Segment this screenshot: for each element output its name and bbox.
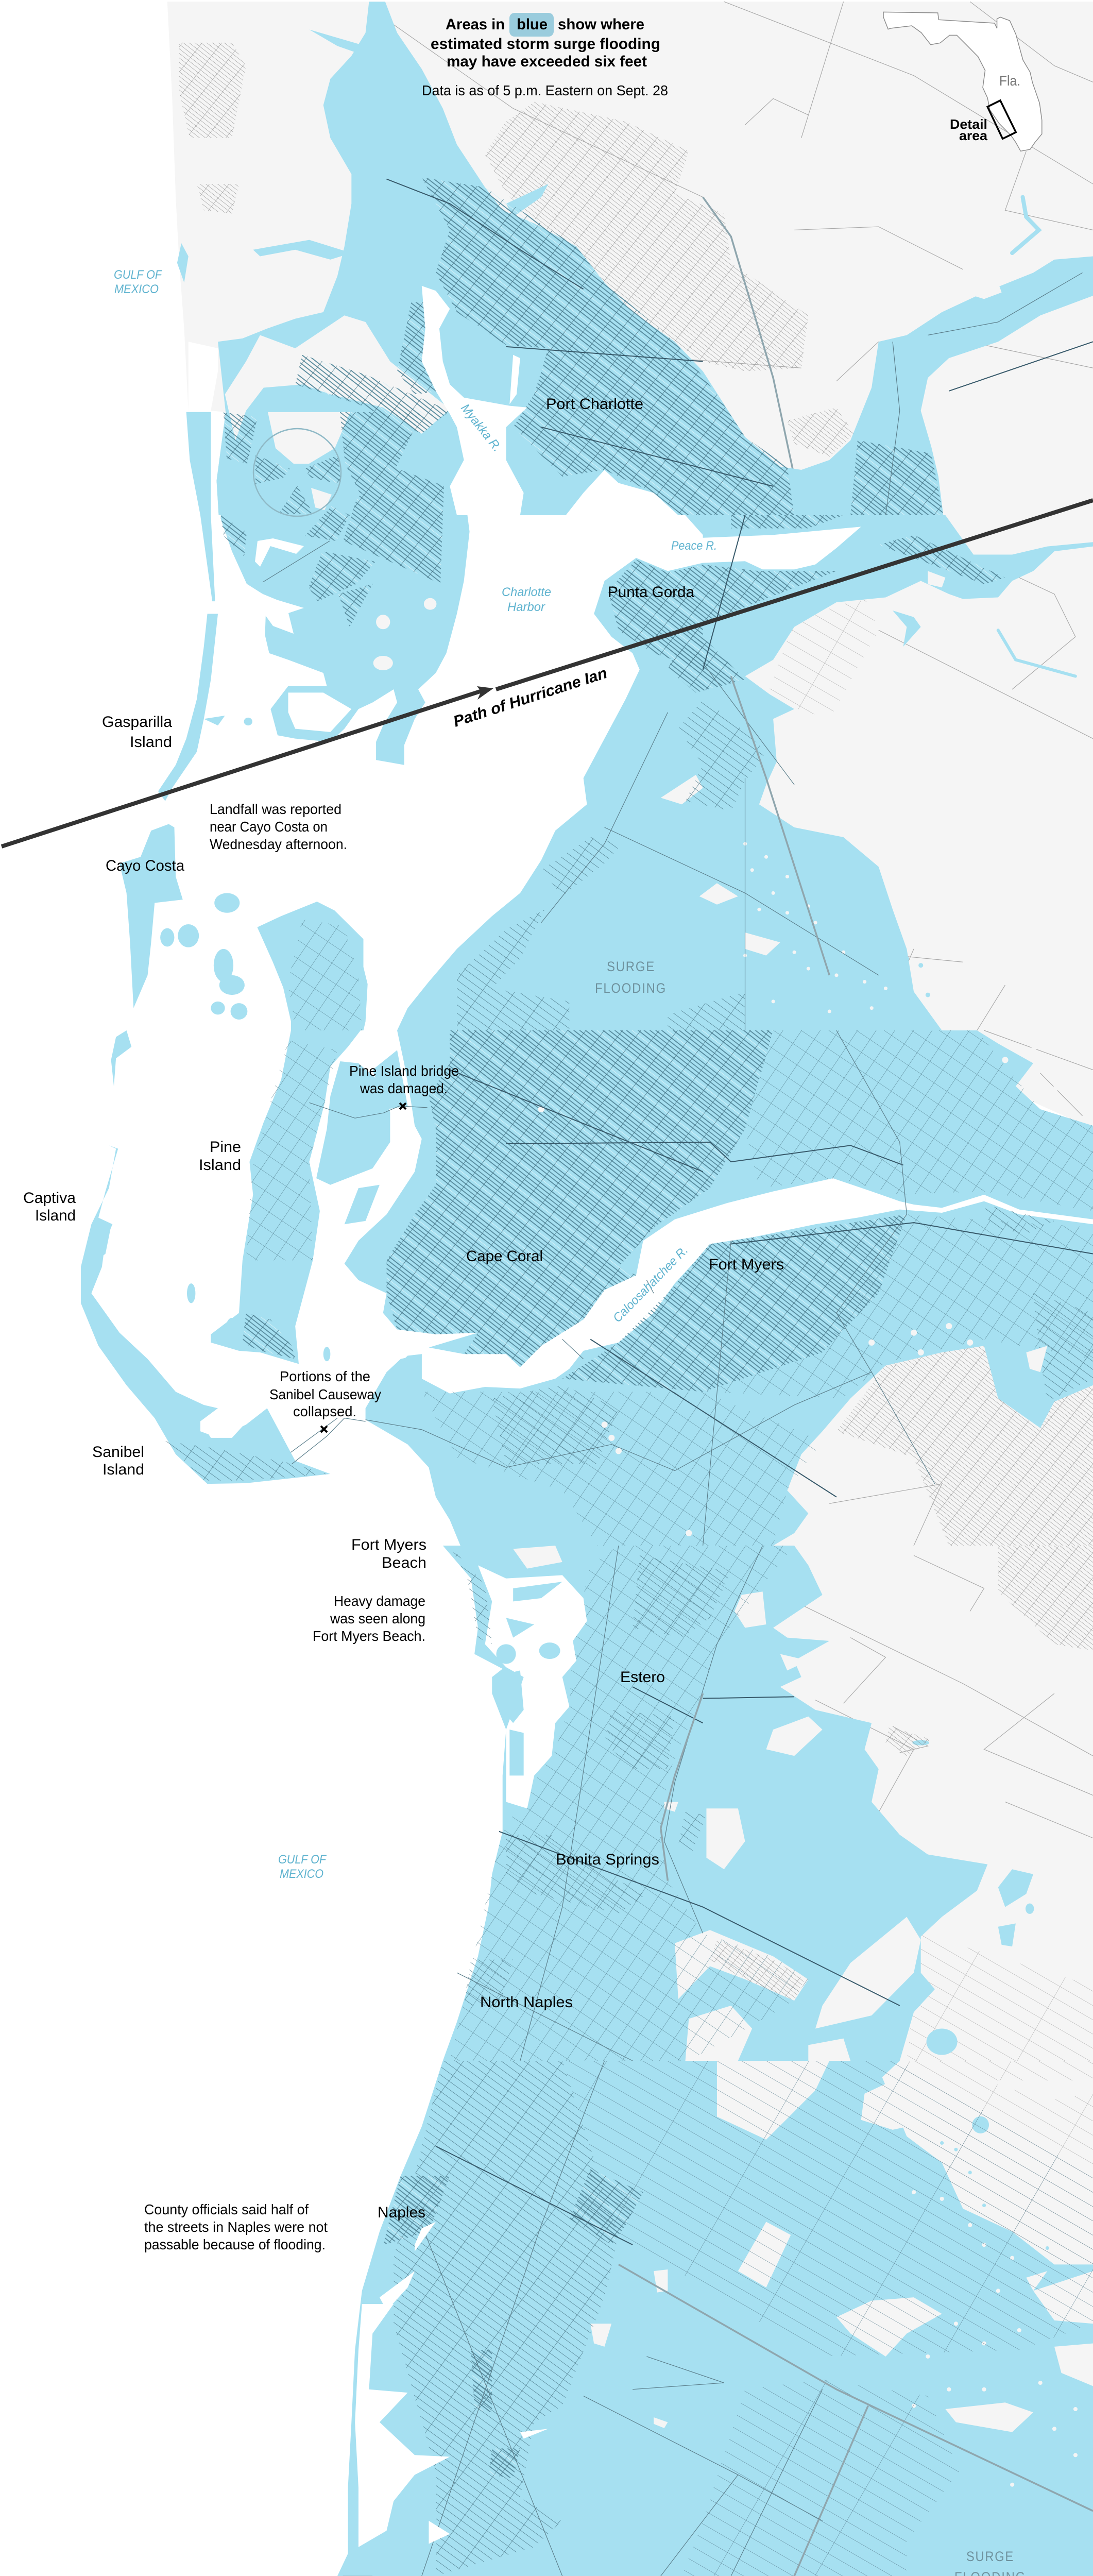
- locator map of Florida: area: [959, 128, 988, 143]
- place labels: Captiva: [23, 1190, 76, 1207]
- title block: Areas in: [446, 16, 505, 33]
- Sanibel streets: [165, 1441, 327, 1481]
- Peace River water: [692, 527, 861, 569]
- annotation: Fort Myers Beach: [313, 1593, 425, 1644]
- Cape Haze peninsula: [220, 515, 470, 765]
- ponds in the peninsula: [373, 598, 436, 670]
- water labels: Peace R.: [671, 539, 717, 553]
- water labels: MEXICO: [114, 282, 159, 296]
- place labels: Naples: [378, 2204, 425, 2221]
- marsh fringe joining the mainland: [372, 1050, 407, 1109]
- surge flooding labels: [595, 959, 1026, 2576]
- urban streets: [394, 2061, 619, 2576]
- blue keyword chip: [509, 13, 554, 37]
- dry patches: [590, 2061, 1093, 2432]
- Pine Island: [211, 1030, 361, 1364]
- dense street clusters: [221, 412, 444, 627]
- annotation: Sanibel Causeway: [269, 1368, 381, 1432]
- water: rivers and harbor: [189, 286, 678, 515]
- flooded area: [216, 2, 1093, 515]
- land base: [167, 2, 1093, 515]
- place labels: Pine: [210, 1139, 241, 1156]
- speckles at flood edge: [914, 2116, 1075, 2485]
- estuary water: [478, 1565, 587, 1808]
- speckled flood edge: [745, 844, 928, 1014]
- small islands in the sound: [160, 718, 252, 1020]
- annotation: Naples: [144, 2201, 328, 2252]
- place labels: Port Charlotte: [546, 396, 643, 413]
- place labels: Sanibel: [92, 1444, 144, 1461]
- place labels: Bonita Springs: [556, 1851, 659, 1868]
- Pine Island streets: [243, 1040, 337, 1359]
- place labels: Fort Myers: [709, 1256, 784, 1273]
- Little Pine Island: [316, 1061, 390, 1185]
- place labels: Gasparilla: [102, 714, 172, 731]
- North Captiva: [111, 1030, 131, 1086]
- place labels: Cayo Costa: [106, 857, 184, 874]
- streets on flooded land: [450, 1546, 808, 2061]
- dense neighborhoods: [383, 2169, 643, 2478]
- Cayo Costa: [119, 824, 183, 1008]
- annotation: Fort Myers Beach: Heavy damage: [334, 1593, 425, 1609]
- main roads: [288, 1030, 1093, 1546]
- estate roads on dry land: [766, 555, 1093, 1030]
- annotation: landfall: Wednesday afternoon.: [210, 836, 347, 852]
- annotation: Pine Island bridge: [349, 1063, 459, 1109]
- annotation: Sanibel Causeway: Portions of the: [280, 1368, 370, 1384]
- annotation: Sanibel Causeway: collapsed.: [293, 1403, 356, 1419]
- annotation: Pine Island bridge: Pine Island bridge: [349, 1063, 459, 1079]
- place labels: Estero: [620, 1669, 665, 1686]
- roads on dry land: [372, 2, 1093, 477]
- dry patches: [513, 1546, 921, 2061]
- place labels: Island: [199, 1157, 241, 1174]
- roads over flood: [541, 515, 879, 1030]
- flooded land north of river: [345, 1030, 1093, 1367]
- wheel street wedges: [255, 455, 341, 514]
- annotation: Fort Myers Beach: Fort Myers Beach.: [313, 1628, 425, 1644]
- street texture on dry patches: [710, 1726, 931, 2001]
- place labels: Beach: [382, 1554, 426, 1571]
- panel: map, Cape Coral and Fort Myers: [81, 1030, 1093, 1546]
- annotation: Naples: the streets in Naples were not: [144, 2219, 328, 2235]
- dry patches: [661, 571, 945, 956]
- annotation: Naples: County officials said half of: [144, 2201, 309, 2217]
- wheel ring: [253, 429, 341, 516]
- path of Hurricane Ian line: [2, 500, 1093, 846]
- Gasparilla Island: [158, 515, 225, 801]
- bridge road: [309, 1103, 428, 1118]
- estate road grid on flooded land: [562, 2061, 1093, 2576]
- diagonal road: [263, 541, 330, 582]
- water labels: Harbor: [507, 600, 545, 614]
- main roads: [457, 1546, 900, 2061]
- surge flooding labels: FLOODING: [595, 980, 667, 996]
- dry patches and clear spots: [541, 1050, 1068, 1533]
- annotation: Pine Island bridge: was damaged.: [360, 1080, 448, 1096]
- suburban streets: [422, 1030, 1093, 1546]
- data date note: Data is as of 5 p.m. Eastern on Sept. 28: [422, 82, 668, 98]
- flooded land: [337, 2061, 1093, 2576]
- place labels: Island: [35, 1207, 76, 1224]
- coastal water gaps: [355, 2222, 548, 2547]
- bay clear area: [200, 1405, 253, 1438]
- dry wedges inside the wheel: [268, 412, 350, 510]
- place labels: Cape Coral: [466, 1248, 543, 1265]
- flood strips on dry land: [893, 611, 1075, 676]
- title block: may have exceeded six feet: [447, 53, 647, 70]
- place labels: Island: [103, 1461, 144, 1478]
- title block: blue: [517, 16, 548, 33]
- title block: show where: [558, 16, 644, 33]
- place labels: North Naples: [480, 1994, 573, 2011]
- land base: [703, 2061, 1093, 2324]
- panel: map, Estero and Bonita Springs: [443, 1546, 1093, 2061]
- title block: estimated storm surge flooding: [431, 36, 660, 53]
- annotation: Naples: passable because of flooding.: [144, 2236, 326, 2252]
- annotation: landfall: [210, 801, 347, 852]
- land base: [703, 1546, 1093, 2061]
- marsh gap on Cape Haze: [288, 692, 351, 732]
- I-75 and main roads: [422, 2061, 1093, 2576]
- causeway: [292, 1418, 366, 1464]
- wheel neighborhood and Cape Haze streets: [221, 412, 444, 634]
- medium streets: [457, 699, 766, 1030]
- water labels: MEXICO: [280, 1867, 323, 1881]
- dense streets on flooded land: [295, 177, 943, 515]
- barrier island strip: [450, 1546, 492, 1644]
- flooded mainland: [397, 515, 1093, 1030]
- Cape Coral streets: [387, 1030, 907, 1392]
- place labels: [23, 396, 784, 2576]
- surge flooding labels: SURGE: [607, 959, 655, 974]
- estates on dry land: [900, 2061, 1093, 2264]
- flooded land: [443, 1546, 987, 2061]
- dry land: [738, 1030, 1093, 1546]
- water labels: GULF OF: [278, 1853, 327, 1867]
- water labels: [114, 268, 717, 1881]
- place labels: Island: [130, 734, 172, 751]
- Manasota barrier island: [186, 412, 211, 515]
- locator map of Florida: [883, 12, 1042, 151]
- flood blobs on dry land: [912, 1740, 1034, 2055]
- locator map of Florida: Fla.: [999, 73, 1020, 89]
- path label: Path of Hurricane Ian: [451, 665, 609, 731]
- annotation: Sanibel Causeway: Sanibel Causeway: [269, 1386, 381, 1402]
- streets on flooded land: [608, 515, 1005, 692]
- detail area box: [987, 100, 1016, 139]
- surge flooding labels: SURGE: [966, 2549, 1014, 2564]
- place labels: Punta Gorda: [608, 584, 694, 601]
- inlets: [255, 538, 304, 634]
- dry land roads and estates: [801, 1546, 1093, 2061]
- panel: map, Naples and Golden Gate Estates: [337, 2061, 1093, 2576]
- Sanibel and Captiva islands: [81, 1145, 330, 1484]
- land base: [703, 515, 1093, 1030]
- water labels: Myakka R.: [458, 401, 504, 454]
- flood fringe strips: [177, 29, 1039, 282]
- annotation: landfall: near Cayo Costa on: [210, 819, 328, 835]
- arrowhead: [477, 686, 493, 700]
- title block: [431, 13, 660, 70]
- water labels: Charlotte: [502, 585, 551, 599]
- bits of Captiva: [88, 1224, 111, 1267]
- place labels: Fort Myers: [351, 1536, 426, 1553]
- small islands: [187, 1185, 422, 1379]
- streets on dry land: [829, 1030, 1093, 1546]
- dense street cluster east: [492, 1205, 1093, 1464]
- roads and rivers over flood: [387, 179, 1083, 515]
- estate roads on Pine Island: [288, 919, 362, 1030]
- locator map of Florida: Detail: [950, 116, 987, 132]
- annotation: Fort Myers Beach: was seen along: [330, 1611, 425, 1626]
- street patches on dry land: [179, 43, 854, 456]
- islands within estuary: [492, 1582, 562, 1775]
- panel: map, Charlotte Harbor and Punta Gorda: [119, 515, 1093, 1030]
- Pine Island north: [257, 902, 368, 1030]
- dry gray patches: [225, 282, 1002, 440]
- flooded land south of river: [366, 1201, 1093, 1546]
- annotation: landfall: Landfall was reported: [210, 801, 341, 817]
- water labels: GULF OF: [114, 268, 162, 282]
- dense street clusters: [464, 1555, 731, 2006]
- water labels: Caloosahatchee R.: [610, 1243, 691, 1325]
- panel: map north, Port Charlotte area: [167, 2, 1093, 515]
